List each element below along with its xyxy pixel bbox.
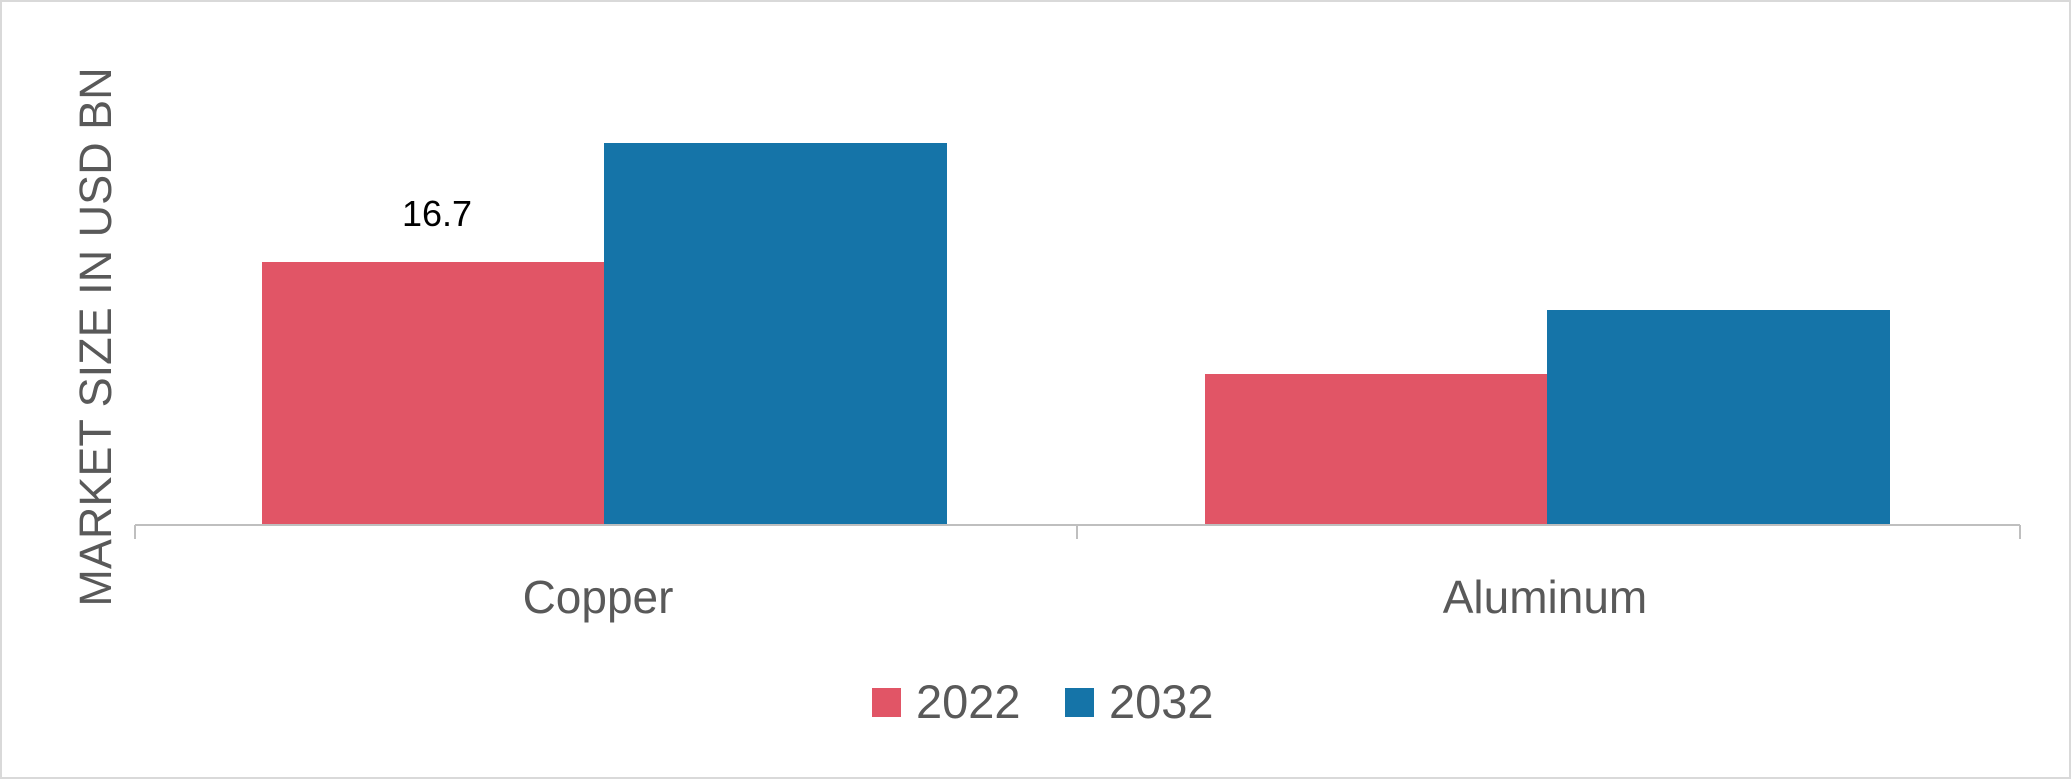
y-axis title: MARKET SIZE IN USD BN — [70, 67, 121, 607]
bar: Aluminum 2022 — [1205, 374, 1547, 524]
legend — [872, 675, 1214, 728]
bar: Copper 2032 — [604, 143, 947, 524]
bar: Aluminum 2032 — [1547, 310, 1890, 524]
legend: 2022 — [916, 675, 1021, 728]
x axis — [135, 525, 2020, 539]
legend: 2032 — [1109, 675, 1214, 728]
category label: Copper: Copper — [523, 571, 673, 623]
bar: Copper 2022 — [262, 262, 604, 524]
data label: 16.7: 16.7 — [402, 193, 472, 234]
category label: Aluminum: Aluminum — [1443, 571, 1647, 623]
